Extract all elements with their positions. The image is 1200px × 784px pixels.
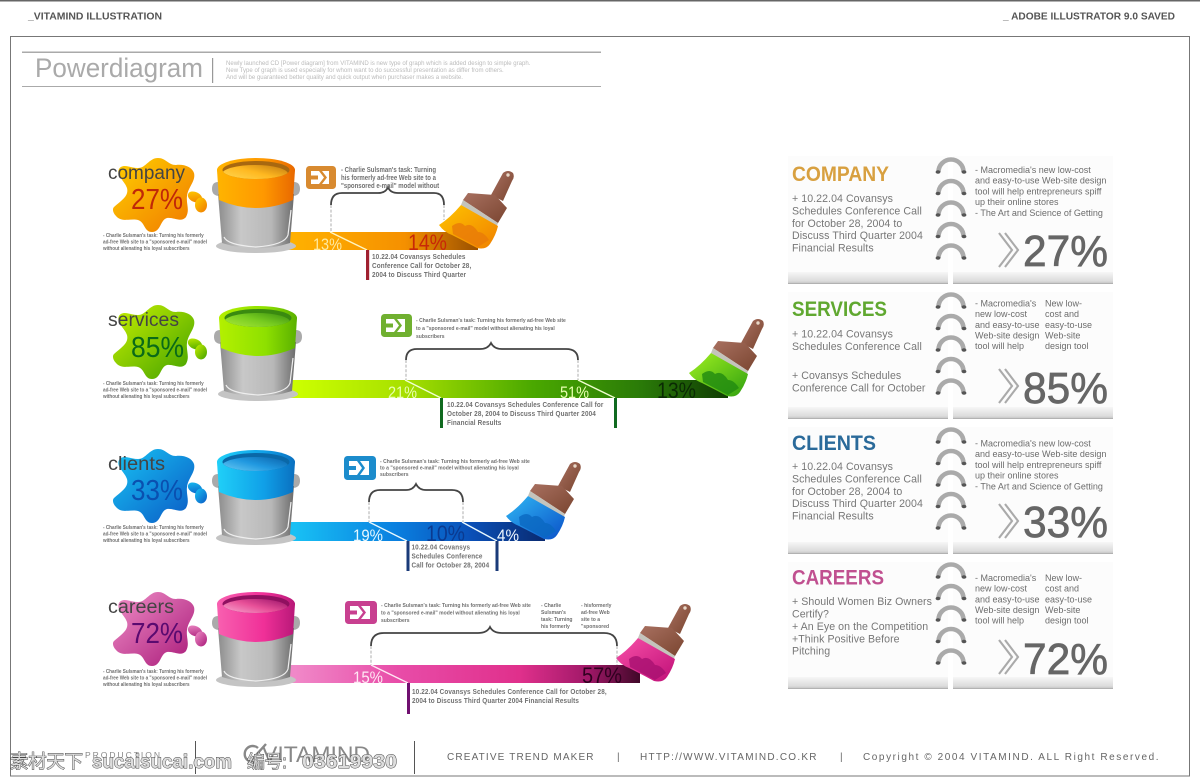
notes: services: easy-to-use: [1045, 320, 1092, 330]
brush: services: [689, 319, 764, 396]
row: services: [102, 305, 764, 428]
rings: careers: [936, 564, 966, 665]
callout: clients: subscribers: [380, 472, 409, 478]
splat: company: 27%: [131, 184, 183, 216]
bucket: services: [214, 306, 302, 401]
notes: company: up their online stores: [975, 197, 1059, 207]
callout column: careers right: "sponsored: [581, 624, 609, 630]
marker note: company: [366, 250, 471, 280]
callout column: careers left: task: Turning: [541, 617, 573, 623]
percent: careers: 72%: [1023, 635, 1108, 684]
progress bar: clients: 10%: [426, 521, 465, 546]
title: Powerdiagram: [35, 53, 203, 83]
heading: services: SERVICES: [792, 298, 887, 321]
marker note: careers: [407, 683, 607, 714]
brush: company: [439, 171, 514, 248]
body: company: Financial Results: [792, 242, 874, 254]
marker note: clients: Schedules Conference: [412, 553, 483, 561]
splat: careers: 72%: [131, 618, 183, 650]
brush: clients: [506, 462, 581, 540]
percent: company: 27%: [1023, 227, 1108, 276]
marker note: careers: 10.22.04 Covansys Schedules Conference Call for October 28,: [412, 689, 607, 696]
body: company: + 10.22.04 Covansys: [792, 193, 893, 205]
body: careers: + Should Women Biz Owners: [792, 596, 932, 608]
splat note: clients: - Charlie Sulsman's task: Turning his formerly: [103, 525, 204, 531]
watermark: 03619930: [302, 752, 397, 773]
marker note: clients: 10.22.04 Covansys: [412, 544, 470, 552]
brace: company: [331, 187, 444, 232]
splat note: company: ad-free Web site to a "sponsored e-mail" model: [103, 239, 208, 246]
notes: clients: - Macromedia's new low-cost: [975, 438, 1091, 448]
splat note: services: - Charlie Sulsman's task: Turning his formerly: [103, 381, 204, 387]
footer separator: |: [617, 752, 621, 763]
splat note: services: ad-free Web site to a "sponsored e-mail" model: [103, 387, 208, 394]
notes: clients: tool will help entrepreneurs spiff: [975, 460, 1102, 470]
progress bar: careers: 15%: [353, 668, 383, 687]
body: company: Discuss Third Quarter 2004: [792, 230, 923, 242]
notes: services: New low-: [1045, 298, 1082, 308]
marker note: services: [440, 398, 617, 428]
body: clients: Financial Results: [792, 510, 874, 522]
notes: company: tool will help entrepreneurs spiff: [975, 186, 1102, 196]
callout: company: his formerly ad-free Web site to a: [341, 175, 436, 182]
callout: careers: to a "sponsored e-mail" model without alienating his loyal: [381, 610, 520, 617]
notes: clients: - The Art and Science of Getting: [975, 481, 1103, 491]
notes: services: - Macromedia's: [975, 298, 1037, 308]
splat: services: 85%: [131, 332, 184, 364]
progress bar: services: 51%: [560, 383, 589, 402]
notes: company: - Macromedia's new low-cost: [975, 165, 1091, 175]
marker note: services: October 28, 2004 to Discuss Third Quarter 2004: [447, 411, 596, 418]
notes: services: new low-cost: [975, 309, 1028, 319]
splat: clients: [108, 449, 207, 523]
chevron: clients: [999, 504, 1018, 538]
splat note: services: without alienating his loyal subscribers: [102, 394, 190, 400]
splat: services: [108, 305, 207, 379]
progress bar: clients: [288, 521, 545, 546]
rings: clients: [936, 430, 966, 530]
production label: PRODUCTION: [85, 750, 160, 760]
notes: careers: Web-site design: [975, 605, 1039, 615]
marker note: clients: [406, 541, 498, 571]
notes: clients: and easy-to-use Web-site design: [975, 449, 1106, 459]
brace: clients: [369, 484, 463, 522]
chevron: services: [999, 369, 1018, 403]
progress bar: clients: 4%: [497, 526, 519, 545]
body: clients: Schedules Conference Call: [792, 474, 922, 486]
callout: services: to a "sponsored e-mail" model without alienating his loyal: [416, 326, 555, 332]
footer tagline: CREATIVE TREND MAKER: [447, 752, 595, 763]
body: careers: Certify?: [792, 608, 829, 620]
splat note: careers: - Charlie Sulsman's task: Turning his formerly: [103, 669, 204, 675]
marker note: clients: Call for October 28, 2004: [412, 562, 489, 570]
callout: services: - Charlie Sulsman's task: Turning his formerly ad-free Web site: [416, 318, 566, 324]
bucket: company: [212, 158, 300, 253]
brush: careers: [616, 604, 691, 682]
body: careers: + An Eye on the Competition: [792, 621, 928, 633]
marker note: company: 2004 to Discuss Third Quarter: [372, 272, 466, 279]
panel: clients: [788, 427, 1113, 554]
body: services: + Covansys Schedules: [792, 370, 901, 382]
callout: careers: subscribers: [381, 618, 410, 624]
watermark: 素材天下: [10, 751, 83, 772]
marker note: services: 10.22.04 Covansys Schedules Conference Call for: [447, 402, 604, 409]
notes: careers: Web-site: [1045, 605, 1080, 615]
brace: services: [406, 343, 578, 380]
callout column: careers right: - hisformerly: [581, 603, 611, 609]
body: company: Schedules Conference Call: [792, 206, 922, 218]
bucket: clients: [212, 450, 300, 545]
body: company: for October 28, 2004 to: [792, 218, 902, 230]
splat note: clients: ad-free Web site to a "sponsored e-mail" model: [103, 531, 208, 538]
progress bar: careers: [288, 663, 640, 688]
splat note: careers: without alienating his loyal subscribers: [102, 682, 190, 688]
callout: services: subscribers: [416, 334, 445, 340]
notes: careers: New low-: [1045, 573, 1082, 583]
body: careers: Pitching: [792, 646, 830, 658]
row: clients: [102, 449, 581, 571]
watermark: sucaisucai.com: [92, 752, 232, 773]
callout column: careers right: ad-free Web: [581, 610, 610, 616]
callout: clients: to a "sponsored e-mail" model without alienating his loyal: [380, 465, 519, 472]
notes: careers: and easy-to-use: [975, 594, 1040, 604]
notes: careers: cost and: [1045, 584, 1079, 594]
rings: services: [936, 294, 966, 395]
chevron: careers: [999, 640, 1018, 674]
callout column: careers left: Sulsman's: [541, 610, 566, 616]
callout column: careers right: site to a: [581, 617, 601, 623]
brace: careers: [371, 627, 617, 665]
body: clients: + 10.22.04 Covansys: [792, 461, 893, 473]
body: services: Schedules Conference Call: [792, 341, 922, 353]
progress bar: services: 21%: [388, 383, 417, 402]
body: services: + 10.22.04 Covansys: [792, 328, 893, 340]
splat note: company: - Charlie Sulsman's task: Turning his formerly: [103, 233, 204, 239]
body: services: Conference Call for October: [792, 382, 926, 394]
splat: careers: careers: [108, 597, 174, 618]
callout: clients: - Charlie Sulsman's task: Turning his formerly ad-free Web site: [380, 459, 530, 465]
marker note: company: 10.22.04 Covansys Schedules: [372, 254, 466, 261]
splat: services: services: [108, 310, 179, 331]
splat note: careers: ad-free Web site to a "sponsored e-mail" model: [103, 675, 208, 682]
watermark: 编号:: [247, 752, 287, 772]
bucket: careers: [212, 592, 300, 687]
copyright: Copyright © 2004 VITAMIND. ALL Right Reserved.: [863, 752, 1160, 763]
splat: careers: [108, 592, 207, 666]
notes: services: tool will help: [975, 341, 1024, 351]
notes: careers: easy-to-use: [1045, 594, 1092, 604]
arrow icon: company: [306, 166, 336, 189]
splat note: clients: without alienating his loyal subscribers: [102, 538, 190, 544]
panel: careers: [788, 562, 1113, 689]
body: clients: for October 28, 2004 to: [792, 486, 902, 498]
arrow icon: clients: [344, 456, 376, 480]
callout column: careers left: - Charlie: [541, 603, 561, 609]
notes: careers: tool will help: [975, 616, 1024, 626]
progress bar: careers: 57%: [582, 663, 622, 688]
splat note: company: without alienating his loyal subscribers: [102, 246, 190, 252]
marker note: careers: 2004 to Discuss Third Quarter 2004 Financial Results: [412, 698, 579, 705]
notes: company: - The Art and Science of Getting: [975, 208, 1103, 218]
progress bar: services: 13%: [657, 378, 696, 403]
splat: clients: clients: [108, 454, 165, 475]
percent: clients: 33%: [1023, 498, 1108, 547]
notes: services: cost and: [1045, 309, 1079, 319]
notes: clients: up their online stores: [975, 471, 1059, 481]
progress bar: clients: 19%: [353, 526, 383, 545]
notes: services: design tool: [1045, 341, 1089, 351]
notes: careers: new low-cost: [975, 584, 1028, 594]
notes: careers: design tool: [1045, 616, 1089, 626]
row: careers: [102, 592, 691, 714]
notes: services: and easy-to-use: [975, 320, 1040, 330]
header right label: _ ADOBE ILLUSTRATOR 9.0 SAVED: [1002, 12, 1175, 22]
splat: clients: 33%: [131, 475, 183, 507]
arrow icon: careers: [345, 601, 377, 624]
header left label: _VITAMIND ILLUSTRATION: [27, 12, 162, 22]
marker note: company: Conference Call for October 28,: [372, 263, 471, 270]
title block: [22, 52, 601, 87]
body: careers: +Think Positive Before: [792, 634, 900, 646]
footer url: HTTP://WWW.VITAMIND.CO.KR: [640, 752, 818, 763]
footer separator: |: [840, 752, 844, 763]
panel: company: [788, 156, 1113, 284]
watermark: [10, 751, 397, 773]
notes: company: and easy-to-use Web-site design: [975, 176, 1106, 186]
heading: clients: CLIENTS: [792, 432, 876, 455]
progress bar: company: 14%: [408, 230, 447, 255]
top rule: [0, 0, 1200, 2]
footer: [85, 741, 1160, 774]
body: clients: Discuss Third Quarter 2004: [792, 498, 923, 510]
marker note: services: Financial Results: [447, 420, 501, 427]
heading: company: COMPANY: [792, 163, 889, 186]
splat: company: company: [108, 163, 185, 184]
panel: services: [788, 292, 1113, 419]
progress bar: services: [290, 378, 728, 403]
callout: company: - Charlie Sulsman's task: Turning: [341, 167, 436, 174]
notes: services: Web-site design: [975, 330, 1039, 340]
callout column: careers left: his formerly: [541, 624, 570, 630]
heading: careers: CAREERS: [792, 566, 884, 590]
rings: company: [936, 160, 966, 260]
vitamind logo: VITAMIND: [262, 742, 370, 767]
callout: company: "sponsored e-mail" model without: [341, 183, 440, 190]
row: company: [102, 158, 514, 280]
title description: And will be guaranteed better quality and quick output when purchaser makes a website.: [226, 75, 463, 81]
percent: services: 85%: [1023, 364, 1108, 413]
callout: careers: - Charlie Sulsman's task: Turning his formerly ad-free Web site: [381, 603, 531, 609]
notes: careers: - Macromedia's: [975, 573, 1037, 583]
chevron: company: [999, 233, 1018, 267]
progress bar: company: 13%: [313, 235, 342, 254]
notes: services: Web-site: [1045, 330, 1080, 340]
title description: Newly launched CD [Power diagram] from VITAMIND is new type of graph which is added design to simple graph.: [226, 61, 531, 67]
title description: New Type of graph is used especially for whom want to do successful presentation as differ from others.: [226, 68, 504, 74]
progress bar: company: [288, 230, 478, 255]
splat: company: [108, 158, 207, 232]
arrow icon: services: [381, 314, 412, 337]
